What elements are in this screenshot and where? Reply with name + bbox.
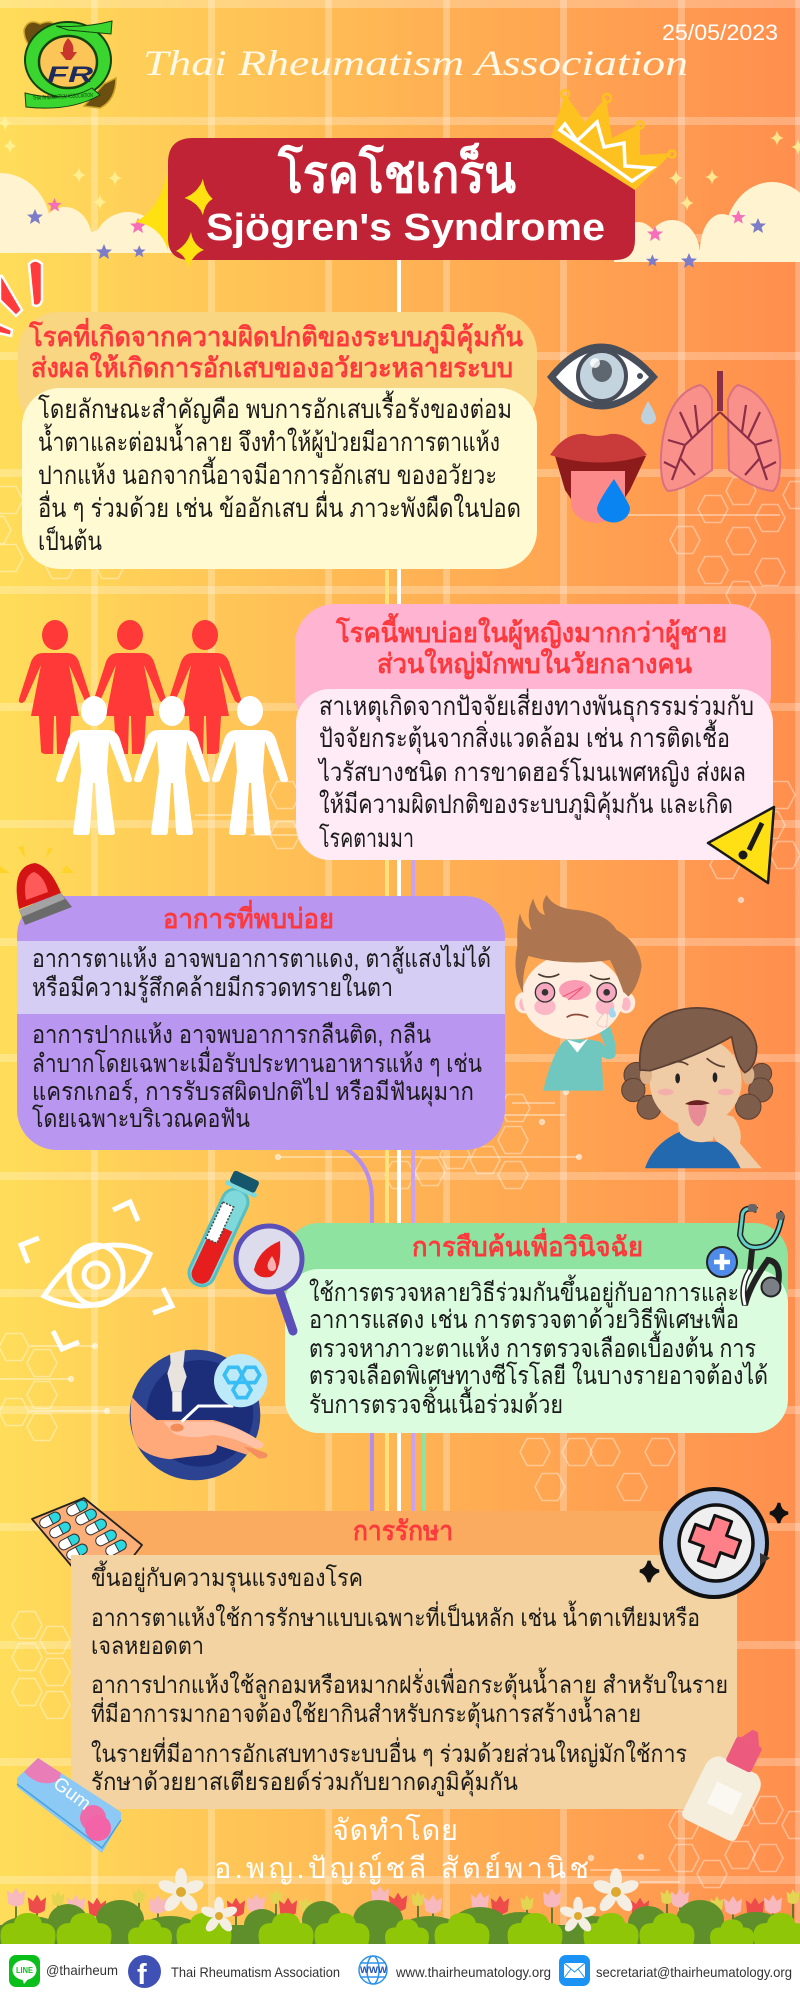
email: secretariat@thairheumatology.org — [596, 1964, 792, 1980]
panel: who is affected and causes — [295, 604, 773, 860]
icon: line: LINE — [16, 1966, 34, 1975]
heading: อาการที่พบบ่อย — [163, 899, 334, 934]
decoration: left cloud — [0, 116, 172, 259]
association logo — [24, 21, 116, 108]
heading: โรคที่เกิดจากความผิดปกติของระบบภูมิคุ้มกัน — [28, 317, 524, 354]
icon: warning triangle — [708, 807, 774, 883]
body text: รับการตรวจชิ้นเนื้อร่วมด้วย — [309, 1386, 563, 1419]
body text: เจลหยอดตา — [91, 1633, 204, 1660]
icon: chewing gum pack: Gum — [49, 1773, 95, 1815]
icon: dry mouth and tongue — [550, 434, 647, 523]
icon: medical cross badge — [640, 1489, 788, 1597]
body text: ที่มีอาการมากอาจต้องใช้ยากินสำหรับกระตุ้นการสร้างน้ำลาย — [91, 1696, 641, 1729]
illustration: boy with dry red eyes — [515, 895, 642, 1091]
body text: เป็นต้น — [38, 525, 102, 556]
decoration: right cloud — [614, 130, 800, 268]
body text: โดยลักษณะสำคัญคือ พบการอักเสบเรื้อรังของต่อม — [38, 390, 512, 424]
facebook name: Thai Rheumatism Association — [171, 1964, 340, 1980]
body text — [309, 1274, 768, 1419]
icon: eye drop bottle — [680, 1718, 782, 1843]
body text: ปัจจัยกระตุ้นจากสิ่งแวดล้อม เช่น การติดเชื้อ — [319, 719, 730, 754]
connector lines between panels — [345, 255, 424, 1525]
icon: sparkles — [176, 178, 213, 268]
panel: diagnostic workup — [285, 1223, 788, 1433]
body text: รักษาด้วยยาสเตียรอยด์ร่วมกับยากดภูมิคุ้มกัน — [91, 1768, 518, 1797]
heading — [335, 612, 727, 680]
icon: chewing gum pack — [17, 1758, 121, 1853]
dry eye text: อาการตาแห้ง อาจพบอาการตาแดง, ตาสู้แสงไม่ได้ — [32, 944, 491, 974]
body text: ขึ้นอยู่กับความรุนแรงของโรค — [91, 1560, 363, 1593]
body text — [317, 688, 754, 853]
body text: อาการแสดง เช่น การตรวจตาด้วยวิธีพิเศษเพื่อ — [309, 1302, 739, 1334]
icon: line — [9, 1955, 40, 1987]
icon: blood test tube — [181, 1169, 263, 1292]
panel: treatment — [32, 1498, 737, 1809]
dry mouth text: อาการปากแห้ง อาจพบอาการกลืนติด, กลืน — [32, 1021, 431, 1049]
credit text — [214, 1813, 589, 1885]
icon: white eye outline with brackets — [21, 1202, 172, 1349]
title english: Sjögren's Syndrome — [206, 207, 605, 249]
title thai: โรคโชเกร็น — [277, 143, 516, 204]
dry mouth text: โดยเฉพาะบริเวณคอฟัน — [32, 1104, 250, 1133]
icon: eye with tear — [547, 344, 658, 424]
icon: skin biopsy — [130, 1350, 267, 1480]
association logo: FR — [47, 62, 93, 87]
association logo: THAI RHEUMATISM ASSOCIATION — [33, 93, 93, 102]
icon: magnifier with blood drop — [236, 1226, 302, 1331]
line handle: @thairheum — [46, 1962, 118, 1978]
heading: การสืบค้นเพื่อวินิจฉัย — [412, 1227, 643, 1262]
title banner — [168, 138, 635, 260]
association name: Thai Rheumatism Association — [143, 43, 688, 83]
panel: common symptoms — [17, 896, 505, 1150]
dry eye text — [32, 944, 491, 1003]
heading: ส่งผลให้เกิดการอักเสบของอวัยวะหลายระบบ — [31, 352, 513, 383]
body text: อื่น ๆ ร่วมด้วย เช่น ข้ออักเสบ ผื่น ภาวะพังผืดในปอด — [38, 490, 521, 523]
panel: autoimmune disease overview — [18, 312, 537, 569]
heading: การรักษา — [353, 1516, 453, 1546]
website: www.thairheumatology.org — [395, 1964, 551, 1980]
body text: โรคตามมา — [319, 823, 414, 853]
dry eye text: หรือมีความรู้สึกคล้ายมีกรวดทรายในตา — [32, 973, 393, 1003]
body text: อาการตาแห้งใช้การรักษาแบบเฉพาะที่เป็นหลัก เช่น น้ำตาเทียมหรือ — [91, 1600, 700, 1632]
body text: ในรายที่มีอาการอักเสบทางระบบอื่น ๆ ร่วมด้วยส่วนใหญ่มักใช้การ — [91, 1737, 687, 1768]
icon: group of women and men — [19, 620, 288, 835]
heading: ส่วนใหญ่มักพบในวัยกลางคน — [377, 648, 693, 680]
body text: น้ำตาและต่อมน้ำลาย จึงทำให้ผู้ป่วยมีอาการตาแห้ง — [38, 423, 500, 458]
icon: red alert burst — [0, 260, 42, 336]
illustration: woman with dry tongue — [622, 1008, 773, 1168]
garden with flowers — [0, 1868, 800, 1945]
credit text: จัดทำโดย — [332, 1813, 458, 1847]
credit text: อ.พญ.ปัญญ์ชลี สัตย์พานิช — [214, 1852, 589, 1885]
icon: mail — [559, 1955, 590, 1986]
dry mouth text: ลำบากโดยเฉพาะเมื่อรับประทานอาหารแห้ง ๆ เช่น — [32, 1046, 482, 1078]
dry mouth text — [32, 1021, 482, 1133]
icon: sparkle behind title — [135, 170, 185, 250]
body text: อาการปากแห้งใช้ลูกอมหรือหมากฝรั่งเพื่อกระตุ้นน้ำลาย สำหรับในราย — [91, 1667, 728, 1700]
dry mouth text: แครกเกอร์, การรับรสผิดปกติไป หรือมีฟันผุมาก — [32, 1077, 474, 1107]
icon: www globe: WWW — [360, 1965, 388, 1975]
footer contact bar — [0, 1944, 800, 2000]
icon: stethoscope — [707, 1204, 784, 1305]
icon: crown — [551, 90, 676, 190]
icon: facebook: f — [137, 1959, 147, 1991]
heading — [28, 317, 524, 383]
body text: ปากแห้ง นอกจากนี้อาจมีอาการอักเสบ ของอวัยวะ — [38, 456, 497, 490]
date: 25/05/2023 — [662, 20, 778, 45]
body text — [91, 1560, 728, 1797]
icon: red siren — [0, 846, 74, 925]
body text — [38, 390, 521, 556]
icon: lungs — [661, 371, 780, 491]
icon: pill blister pack — [32, 1498, 142, 1600]
icon: facebook — [128, 1955, 161, 1991]
icon: www globe — [359, 1956, 388, 1984]
heading: โรคนี้พบบ่อยในผู้หญิงมากกว่าผู้ชาย — [335, 612, 727, 650]
